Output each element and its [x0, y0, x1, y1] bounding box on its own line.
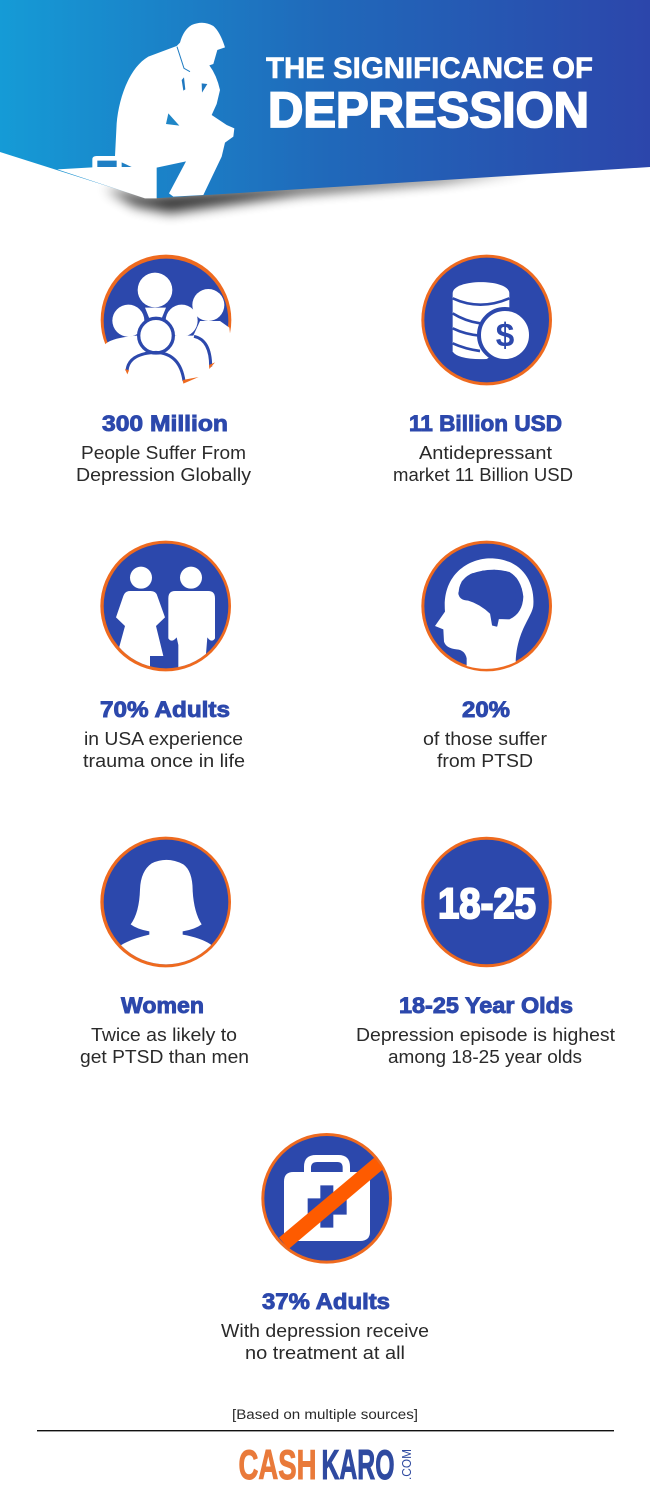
- stat heading: 18-25 Year Olds: [399, 993, 573, 1018]
- header banner: [0, 0, 650, 213]
- description: Depression Globally: [76, 465, 251, 485]
- description: of those suffer: [423, 729, 547, 749]
- panel: 70% adults: [83, 541, 245, 771]
- icon: woman silhouette: [100, 837, 231, 973]
- description: [356, 1025, 615, 1067]
- logo: cashkaro: [238, 1441, 414, 1488]
- description: [393, 443, 573, 485]
- description: from PTSD: [437, 751, 533, 771]
- title: [266, 52, 593, 138]
- header shadow: [105, 170, 530, 213]
- stat heading: 300 Million: [102, 411, 228, 436]
- icon: coin stack with dollar: $: [496, 318, 515, 355]
- description: Depression episode is highest: [356, 1025, 615, 1045]
- icon: coin stack with dollar: [421, 255, 552, 385]
- description: Antidepressant: [419, 443, 552, 463]
- icon: woman and man: [100, 541, 231, 673]
- icon: 18-25 badge: [421, 837, 552, 967]
- description: no treatment at all: [245, 1343, 405, 1363]
- panel: 37% adults: [221, 1133, 429, 1363]
- icon: crossed out first aid kit: [261, 1133, 392, 1264]
- stat heading: 37% Adults: [262, 1289, 390, 1314]
- description: [83, 729, 245, 771]
- logo: cashkaro: KARO: [322, 1441, 394, 1488]
- title: THE SIGNIFICANCE OF: [266, 52, 593, 85]
- stat heading: 20%: [462, 697, 510, 722]
- description: [80, 1025, 249, 1067]
- icon: head with brain: [421, 541, 552, 671]
- title: DEPRESSION: [268, 82, 589, 138]
- stat heading: 11 Billion USD: [409, 411, 562, 436]
- description: in USA experience: [84, 729, 243, 749]
- logo: cashkaro: CASH: [238, 1441, 316, 1488]
- description: trauma once in life: [83, 751, 245, 771]
- description: get PTSD than men: [80, 1047, 249, 1067]
- panel: 11 billion: [393, 255, 573, 485]
- description: [76, 443, 251, 485]
- icon: group of people: [97, 255, 237, 392]
- source note: [Based on multiple sources]: [232, 1407, 418, 1422]
- description: Twice as likely to: [91, 1025, 237, 1045]
- logo: cashkaro: .COM: [399, 1449, 414, 1480]
- panel: 20%: [421, 541, 552, 771]
- description: [221, 1321, 429, 1363]
- stat heading: Women: [121, 993, 204, 1018]
- description: [423, 729, 547, 771]
- description: People Suffer From: [81, 443, 246, 463]
- description: among 18-25 year olds: [388, 1047, 582, 1067]
- icon: 18-25 badge: 18-25: [438, 880, 536, 928]
- header background: [0, 0, 650, 198]
- panel: 18-25 year olds: [356, 837, 615, 1067]
- icon: thinking man silhouette on briefcase: [57, 23, 234, 198]
- panel: 300 million: [76, 255, 251, 485]
- stat heading: 70% Adults: [100, 697, 230, 722]
- description: market 11 Billion USD: [393, 465, 573, 485]
- panel: women: [80, 837, 249, 1067]
- description: With depression receive: [221, 1321, 429, 1341]
